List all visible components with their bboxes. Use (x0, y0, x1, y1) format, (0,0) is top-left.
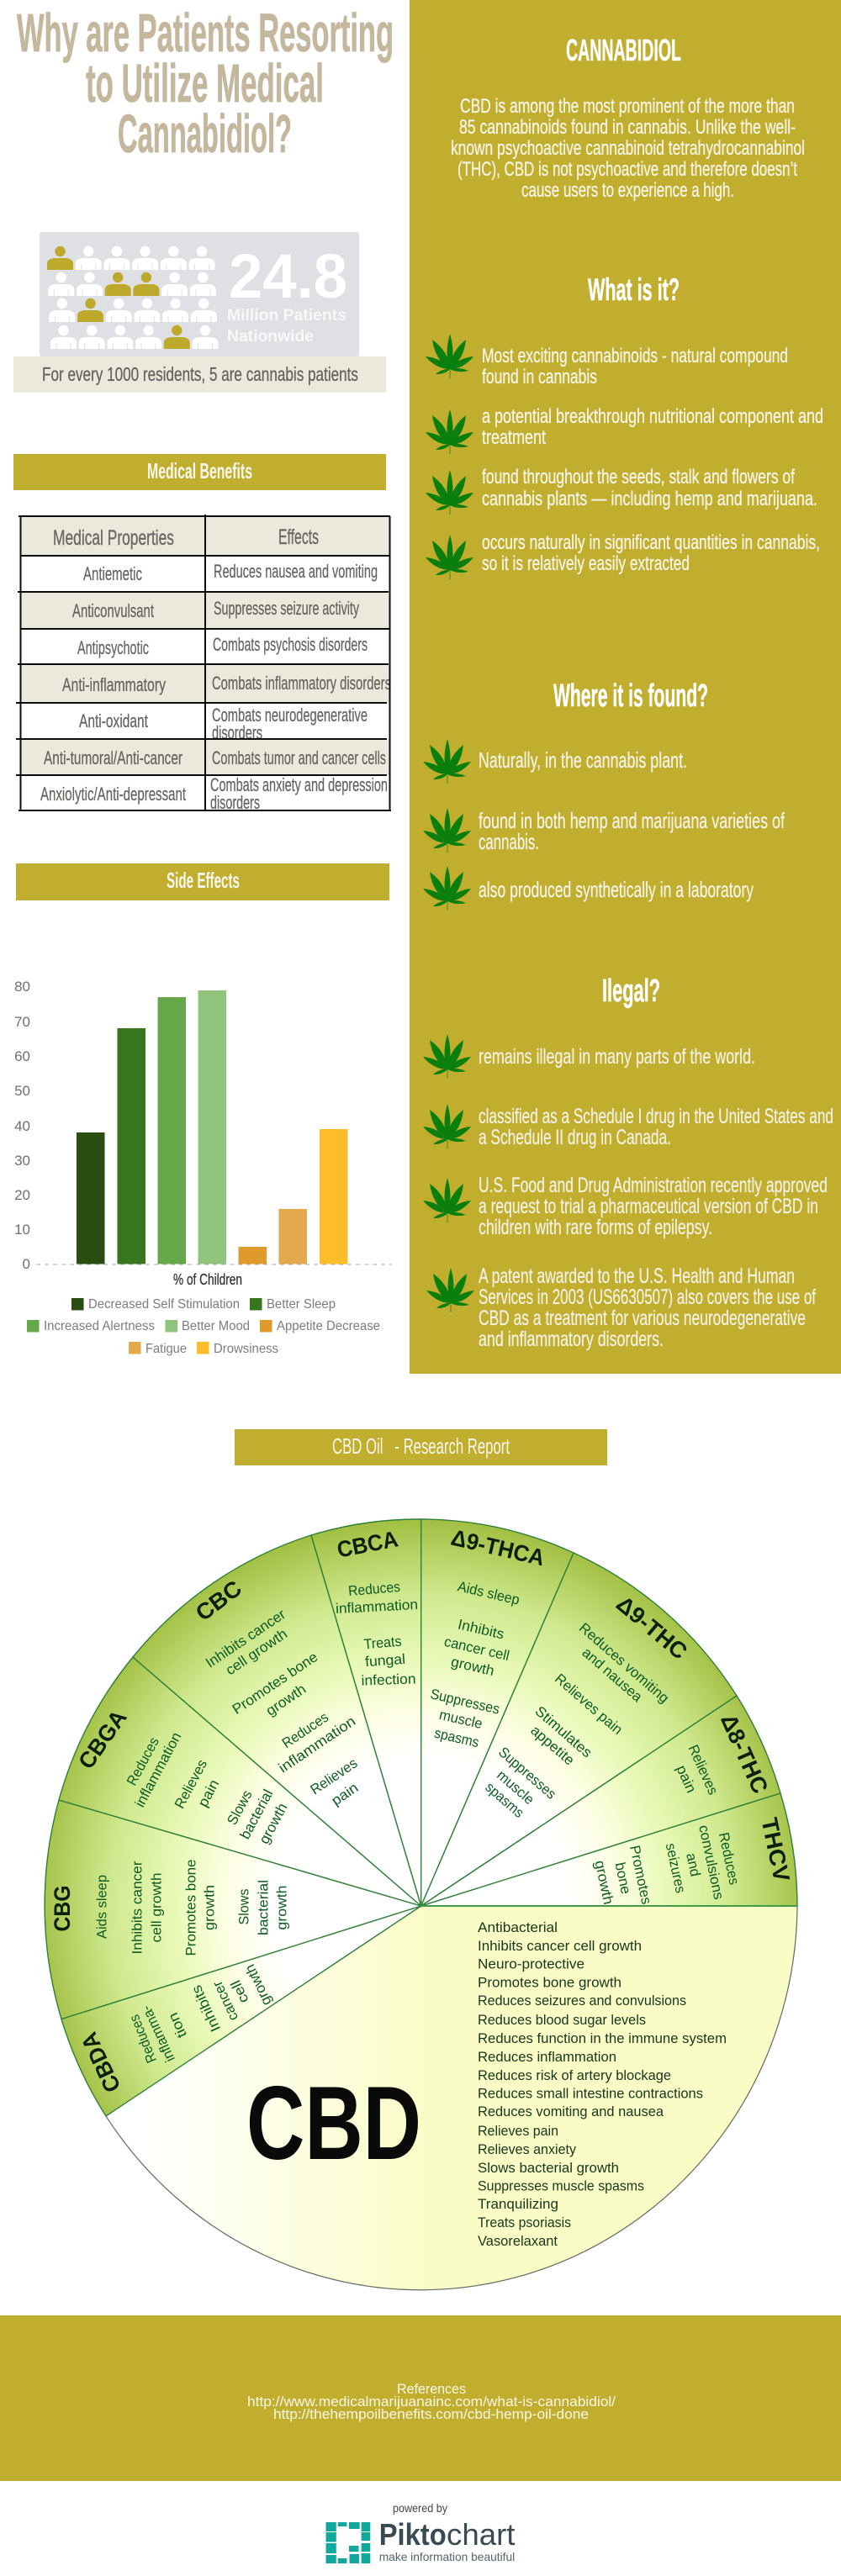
heading: CBD oil research report (235, 1429, 607, 1465)
title (17, 3, 394, 164)
bar chart: side effects (14, 979, 392, 1356)
wedge: delta-9-THC: Reduces vomiting (576, 1620, 672, 1706)
panel: cannabidiol facts (410, 0, 841, 1374)
bullet text: found in cannabis (482, 366, 597, 388)
wedge: delta-9-THC: and nausea (579, 1644, 646, 1705)
wedge: CBCA: CBCA (335, 1526, 400, 1563)
wedge: delta-9-THCA: muscle (438, 1707, 484, 1732)
wedge: delta-9-THCA: Suppresses (429, 1686, 501, 1718)
logo wordmark: piktochart (379, 2517, 515, 2563)
wedge: CBG: growth (274, 1885, 289, 1930)
wedge: CBGA: inflammation (132, 1729, 184, 1810)
wedge: CBC: CBC (191, 1576, 246, 1626)
bullet text (479, 1174, 828, 1239)
list of CBD effects: Suppresses muscle spasms (478, 2177, 644, 2194)
column: effects: Combats inflammatory disorders (212, 673, 391, 694)
wedge: CBG: Inhibits cancer (130, 1861, 145, 1954)
table header: Effects (278, 525, 319, 549)
stat caption: Million Patients (227, 307, 346, 325)
wedge: delta-9-THC: muscle (494, 1767, 537, 1808)
wedge: delta-9-THCA: Aids sleep (456, 1578, 521, 1608)
y axis labels: 70 (14, 1014, 30, 1030)
logo wordmark: piktochart: Pikto (379, 2517, 447, 2552)
wedge: CBGA (59, 1657, 421, 1906)
y axis labels: 10 (14, 1222, 30, 1238)
wedge: delta-9-THC: Relieves pain (552, 1671, 626, 1738)
wedge: CBD (106, 1906, 797, 2290)
wedge: delta-9-THC (421, 1553, 737, 1906)
list of CBD effects: Promotes bone growth (478, 1974, 621, 1991)
footer: references: References (397, 2381, 466, 2397)
bullet text (479, 1105, 833, 1149)
wedge: CBDA: cell (227, 1977, 252, 2006)
bullet text: and inflammatory disorders. (479, 1328, 664, 1351)
wedge: CBC: growth (263, 1681, 309, 1719)
y axis labels: 40 (14, 1118, 30, 1134)
list of CBD effects: Neuro-protective (478, 1956, 584, 1972)
wedge: THCV: growth (591, 1859, 616, 1906)
bullet text (479, 808, 785, 854)
heading: cannabidiol: CANNABIDIOL (566, 33, 681, 67)
icon: leaf (426, 1268, 474, 1312)
heading: what is it: What is it? (588, 272, 680, 307)
wedge: CBG: growth (202, 1885, 217, 1930)
wedge: delta-9-THCA: spasms (433, 1725, 480, 1750)
wedge: CBG: Slows (235, 1888, 252, 1925)
wedge: delta-9-THCA: growth (450, 1654, 495, 1679)
bullet text: a Schedule II drug in Canada. (479, 1126, 671, 1149)
wedge: CBCA: inflammation (336, 1597, 418, 1617)
icon: leaf (423, 739, 471, 784)
icon: leaf (426, 535, 473, 579)
wedge: CBC: pain (329, 1780, 361, 1808)
wedge: CBDA: cancer (209, 1978, 241, 2024)
wedge: CBCA: Reduces (347, 1579, 401, 1599)
y axis labels: 20 (14, 1187, 30, 1203)
wedge: CBGA: Reduces (124, 1734, 162, 1788)
icon: leaf (423, 1104, 471, 1148)
wedge: CBG: Promotes bone (183, 1860, 198, 1956)
stat banner: For every 1000 residents, 5 are cannabis patients (42, 363, 358, 385)
wedge: CBC: Reduces (279, 1709, 331, 1751)
column: effects: Combats neurodegenerative (212, 705, 368, 726)
list of CBD effects: Treats psoriasis (478, 2214, 571, 2230)
column: medical properties: Anticonvulsant (72, 600, 154, 621)
wedge: CBGA: bacterial (237, 1787, 276, 1842)
heading: illegal: Ilegal? (602, 974, 660, 1009)
list of CBD effects: Reduces vomiting and nausea (478, 2104, 664, 2119)
column: effects: Reduces nausea and vomiting (214, 561, 378, 582)
heading: where it is found: Where it is found? (553, 678, 708, 714)
pie chart: cannabinoid effects wheel (45, 1519, 797, 2290)
wedge: delta-8-THC (421, 1696, 780, 1906)
heading: side effects (16, 863, 389, 900)
wedge: CBDA: inflamma- (138, 2003, 178, 2065)
table: medical properties and effects (16, 515, 391, 813)
y axis labels: 60 (14, 1048, 30, 1064)
column: effects: Combats anxiety and depression (210, 774, 388, 795)
wedge: CBGA: pain (195, 1777, 222, 1809)
wedge: CBGA: Relieves (172, 1757, 210, 1811)
panel: patient statistics (13, 232, 386, 393)
wedge: THCV: THCV (756, 1815, 795, 1884)
list of CBD effects: Relieves pain (478, 2123, 558, 2139)
column: medical properties: Anti-tumoral/Anti-cancer (44, 747, 182, 768)
wedge: delta-9-THCA (421, 1519, 574, 1906)
y axis labels (14, 979, 30, 1272)
column: effects: Combats psychosis disorders (213, 634, 368, 655)
footer: references: http://www.medicalmarijuanainc.com/what-is-cannabidiol/ (247, 2394, 616, 2410)
bullet text: children with rare forms of epilepsy. (479, 1216, 712, 1239)
heading: medical benefits: Medical Benefits (147, 458, 252, 483)
list of CBD effects: Antibacterial (478, 1919, 558, 1935)
column: effects: disorders (212, 722, 262, 743)
legend: Appetite Decrease (277, 1319, 380, 1333)
wedge: CBCA: Treats (363, 1634, 402, 1652)
icon: leaf (423, 808, 471, 853)
logo wordmark: piktochart: chart (447, 2517, 515, 2552)
column: medical properties: Anti-oxidant (79, 710, 148, 731)
wedge: CBCA: infection (361, 1671, 416, 1689)
title: to Utilize Medical (86, 53, 324, 113)
list of CBD effects: Reduces risk of artery blockage (478, 2067, 671, 2083)
column: medical properties: Antiemetic (83, 563, 142, 584)
intro paragraph: cause users to experience a high. (521, 179, 734, 202)
column: medical properties: Antipsychotic (77, 637, 149, 658)
powered by label: powered by (393, 2501, 447, 2515)
list of CBD effects: Tranquilizing (478, 2196, 558, 2212)
icon: leaf (423, 866, 471, 911)
icon: leaf (426, 470, 473, 515)
wedge: CBC: Promotes bone (230, 1649, 320, 1718)
wedge: delta-9-THC: spasms (482, 1779, 527, 1821)
title: Why are Patients Resorting (17, 3, 394, 63)
wedge: CBC: inflammation (276, 1713, 358, 1776)
legend: Better Sleep (267, 1297, 336, 1312)
table header: Medical Properties (53, 526, 174, 550)
wedge: delta-9-THCA: Inhibits (457, 1616, 505, 1643)
column: medical properties: Anxiolytic/Anti-depressant (40, 784, 186, 805)
bullet text (479, 1264, 816, 1351)
wedge: THCV (421, 1793, 797, 1906)
wedge: THCV: Reduces (716, 1831, 743, 1886)
icon: leaf (426, 409, 473, 454)
legend: Better Mood (182, 1319, 250, 1333)
wedge: CBG: bacterial (256, 1880, 271, 1935)
bullet text (482, 405, 823, 449)
wedge: CBC: cell growth (223, 1626, 290, 1678)
intro paragraph (451, 95, 805, 202)
wedge: CBDA: Inhibits (188, 1982, 224, 2035)
footer: references (0, 2315, 841, 2481)
heading: medical benefits (13, 454, 386, 490)
wedge: CBDA: Reduces (126, 2013, 160, 2065)
bullet text (482, 345, 788, 388)
list of CBD effects (478, 1919, 727, 2249)
wedge: CBC: Relieves (308, 1755, 360, 1797)
y axis labels: 30 (14, 1153, 30, 1169)
logo wordmark: piktochart: make information beautiful (379, 2550, 515, 2563)
list of CBD effects: Relieves anxiety (478, 2141, 576, 2157)
wedge: delta-9-THC: Δ9-THC (611, 1591, 692, 1665)
wedge: CBDA: CBDA (77, 2029, 125, 2096)
list of CBD effects: Vasorelaxant (478, 2233, 558, 2249)
list of CBD effects: Reduces seizures and convulsions (478, 1993, 686, 2009)
y axis labels: 50 (14, 1083, 30, 1099)
stat caption: Nationwide (227, 328, 314, 346)
list of CBD effects: Slows bacterial growth (478, 2160, 619, 2176)
wedge: CBG: Aids sleep (94, 1875, 109, 1939)
wedge: delta-9-THC: Suppresses (495, 1744, 559, 1803)
icon: grid of people (47, 246, 219, 349)
wedge: THCV: Promotes (627, 1844, 654, 1906)
wedge: CBG: cell growth (148, 1873, 165, 1942)
list: where it is found (423, 739, 785, 911)
stat caption (227, 307, 346, 346)
column: effects (210, 561, 391, 813)
icon: leaf (426, 334, 473, 378)
column: effects: disorders (210, 792, 260, 813)
bullet text: treatment (482, 426, 546, 449)
heading: CBD oil research report: CBD Oil - Research Report (332, 1433, 510, 1459)
wedge: THCV: convulsions (696, 1824, 727, 1901)
wedge: CBDA: growth (241, 1961, 275, 2009)
list of CBD effects: Reduces small intestine contractions (478, 2085, 703, 2102)
legend: Drowsiness (214, 1342, 278, 1356)
title: Cannabidiol? (118, 103, 292, 164)
list: illegal (423, 1034, 833, 1351)
wedge: CBDA: tion (165, 2010, 190, 2040)
icon: leaf (423, 1034, 471, 1079)
list of CBD effects: Inhibits cancer cell growth (478, 1938, 642, 1954)
x axis label: % of Children (173, 1271, 242, 1288)
wedge: CBGA: CBGA (73, 1705, 132, 1774)
heading: side effects: Side Effects (167, 868, 240, 893)
bullet text (482, 531, 820, 575)
wedge: CBCA (311, 1519, 421, 1906)
wedge: CBC: Inhibits cancer (203, 1606, 288, 1671)
wedge: THCV: bone (611, 1861, 634, 1896)
wedge: CBGA: Slows (224, 1787, 256, 1828)
list of CBD effects: Reduces function in the immune system (478, 2030, 727, 2046)
bullet text (482, 466, 817, 510)
footer: references: http://thehempoilbenefits.com/cbd-hemp-oil-done (273, 2406, 589, 2422)
list of CBD effects: Reduces blood sugar levels (478, 2012, 646, 2028)
column: effects: Combats tumor and cancer cells (212, 747, 386, 768)
list: what is it (426, 334, 823, 579)
wedge: delta-8-THC: pain (673, 1763, 700, 1795)
stat banner (13, 356, 386, 393)
wedge: delta-8-THC: Relieves (685, 1742, 721, 1797)
column: effects: Suppresses seizure activity (214, 598, 359, 619)
y axis labels: 80 (14, 979, 30, 995)
wedge: delta-9-THC: Stimulates (532, 1703, 595, 1760)
icon: leaf (423, 1178, 471, 1222)
wedge: CBGA: growth (256, 1801, 291, 1846)
list of CBD effects: Reduces inflammation (478, 2049, 616, 2065)
wedge: CBG (45, 1800, 421, 2019)
wedge: delta-9-THC: appetite (527, 1722, 578, 1769)
legend: Increased Alertness (44, 1319, 155, 1333)
wedge: THCV: seizures (663, 1842, 689, 1894)
wedge: delta-8-THC: Δ8-THC (716, 1710, 773, 1797)
wedge: THCV: and (683, 1851, 704, 1878)
column: medical properties: Anti-inflammatory (62, 674, 166, 695)
bullet text: cannabis. (479, 829, 539, 854)
column: medical properties (40, 563, 186, 805)
y axis labels: 0 (23, 1256, 30, 1272)
icon: piktochart logo (326, 2522, 370, 2563)
bars (77, 990, 348, 1264)
wedge: CBG: CBG (50, 1885, 75, 1932)
large label: CBD: CBD (246, 2066, 421, 2182)
big number: 24.8 (229, 241, 347, 311)
wedge: CBCA: fungal (364, 1651, 406, 1670)
wedge: delta-9-THCA: cancer cell (442, 1634, 511, 1664)
legend: Fatigue (145, 1342, 187, 1356)
wedge: CBC (133, 1535, 421, 1906)
wedge: CBDA (61, 1906, 421, 2116)
legend: Decreased Self Stimulation (88, 1297, 240, 1312)
legend (27, 1297, 380, 1356)
bullet text: so it is relatively easily extracted (482, 552, 690, 575)
bullet text: Naturally, in the cannabis plant. (479, 747, 687, 773)
wedge: delta-9-THCA: Δ9-THCA (449, 1525, 547, 1570)
table header (53, 525, 319, 550)
